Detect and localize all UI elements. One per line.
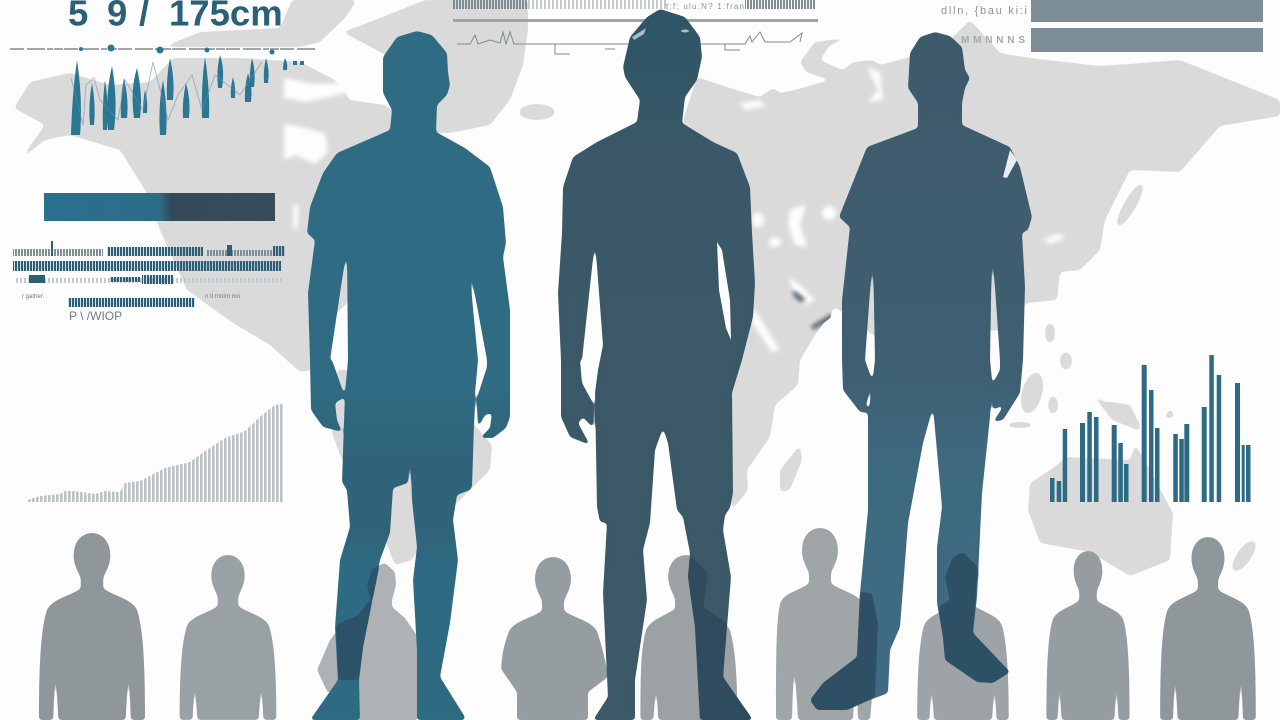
- shirt highlight on man 3: [1003, 150, 1017, 178]
- map: arctic north america: [163, 0, 357, 47]
- row B: [13, 261, 281, 271]
- map: greenland: [343, 0, 528, 133]
- map: south america: [332, 370, 492, 565]
- row D: r gather:: [22, 294, 45, 300]
- man 2 overlap with figure 5: [688, 555, 753, 720]
- main silhouette: man 3: [810, 32, 1032, 710]
- top right labels and boxes: [941, 0, 1263, 52]
- map: north america: [14, 58, 420, 372]
- main silhouette: man 1: [307, 31, 510, 720]
- chart spikes: [71, 44, 304, 135]
- figure 7: [917, 552, 1009, 720]
- man 2 body: [558, 9, 755, 720]
- spiky distribution chart: [10, 44, 315, 135]
- right grouped bar chart: [1050, 355, 1250, 502]
- figure 9: [1160, 537, 1256, 720]
- map: africa: [725, 190, 835, 510]
- strip: dark segment: [453, 0, 528, 9]
- label one: dlln, {bau ki:i: [941, 5, 1027, 17]
- figure 5: [640, 555, 737, 720]
- man 3 body: [810, 32, 1032, 710]
- strip: right segment: [745, 0, 815, 9]
- small background figures: [39, 528, 1256, 720]
- sparkline: [457, 32, 802, 54]
- man 2 arm gap: [717, 242, 731, 340]
- figure 2: [180, 555, 276, 720]
- man 2 head highlights: [632, 28, 689, 40]
- figure 3: [317, 563, 418, 720]
- strip: light segment: [528, 0, 666, 9]
- chart crossing lines: [71, 62, 262, 125]
- top centre strip chart: [453, 0, 818, 54]
- figure 4: [501, 557, 608, 720]
- map: dark coast marks: [792, 290, 832, 330]
- figure 6: [776, 528, 873, 720]
- small caption: P \ /WIOP: [69, 309, 122, 323]
- row C: [14, 275, 282, 284]
- map: asia-pacific islands: [519, 104, 1260, 576]
- figure 8: [1046, 551, 1130, 720]
- figure 1: [39, 533, 145, 720]
- rising bar chart: [27, 404, 283, 502]
- map: scandinavia: [800, 37, 853, 80]
- row D: [22, 294, 240, 307]
- man 3 overlap with figure 7: [938, 552, 1010, 683]
- label two: M M N N N S: [961, 35, 1025, 46]
- box two: [1031, 28, 1263, 52]
- gradient bar: [44, 193, 275, 221]
- chart axis dash line: [10, 48, 315, 50]
- man 1 body: [307, 31, 510, 720]
- main silhouette: man 2: [558, 9, 755, 720]
- man 1 overlap with figure 3: [336, 563, 380, 680]
- row D: n tl rnnlrn mn: [205, 294, 240, 300]
- strip: small label: t:f: ulu:N? 1:fran: [666, 2, 744, 11]
- strip: rule: [453, 19, 818, 22]
- barcode text block: [13, 241, 285, 323]
- man 3 overlap with figure 6: [810, 592, 878, 710]
- map: water gaps: [284, 67, 1065, 352]
- world map: [14, 0, 1280, 576]
- row A: [13, 241, 285, 256]
- map: eurasia: [683, 20, 1280, 340]
- box one: [1031, 0, 1263, 22]
